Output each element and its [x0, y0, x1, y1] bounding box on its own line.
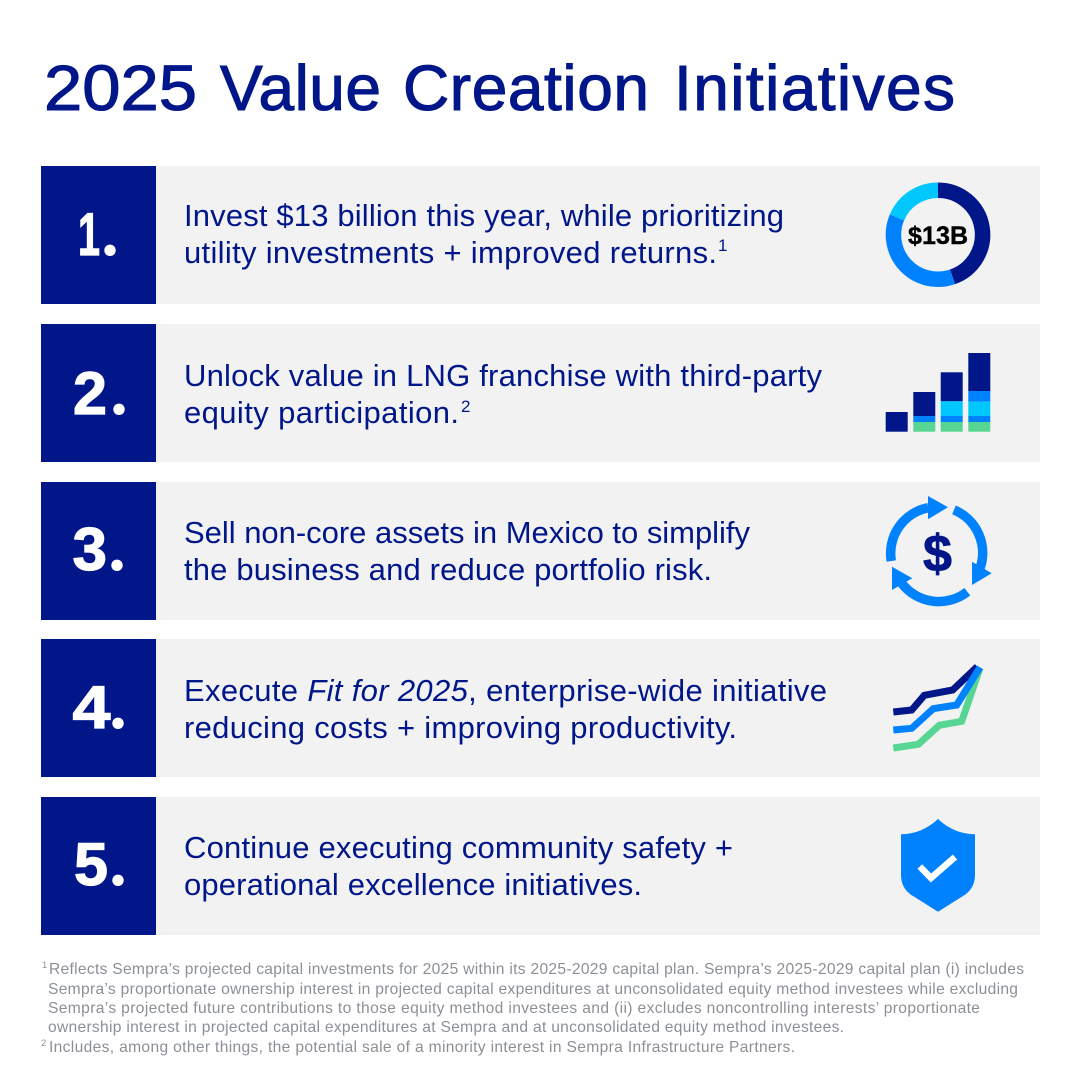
number badge 4: 4 — [72, 674, 111, 741]
footnotes: Sempra’s proportionate ownership interest in projected capital expenditures at unconsolidated equity method investees while excluding — [48, 981, 1018, 998]
number badge 5: . — [109, 824, 127, 901]
icon: rising line chart — [893, 667, 980, 748]
title — [44, 52, 955, 124]
title: Creation — [403, 52, 649, 124]
text: initiative 3: the business and reduce portfolio risk. — [184, 552, 712, 587]
text: initiative 4: reducing costs + improving productivity. — [184, 710, 737, 745]
icon: dollar with circular arrows: $ — [923, 525, 952, 583]
icon: shield with check mark — [901, 819, 975, 912]
footnotes: Reflects Sempra’s projected capital investments for 2025 within its 2025-2029 capital plan. Sempra’s 2025-2029 capital plan (i) includes — [49, 961, 1024, 978]
number badge 1: 1 — [78, 201, 100, 268]
number badge 5: 5 — [74, 831, 108, 898]
icon: stacked bar chart — [886, 353, 990, 432]
panel: initiative 5 — [41, 797, 1040, 935]
number badge 1 — [41, 166, 156, 304]
footnotes: ownership interest in projected capital expenditures at Sempra and at unconsolidated equity method investees. — [48, 1019, 844, 1036]
text: initiative 2: 2 — [461, 397, 470, 416]
text: initiative 5: operational excellence initiatives. — [184, 867, 642, 902]
number badge 3 — [41, 482, 156, 620]
number badge 4: . — [109, 667, 127, 744]
text: initiative 5: Continue executing community safety + — [184, 830, 733, 865]
text: initiative 2: equity participation. — [184, 395, 459, 430]
text: initiative 2: Unlock value in LNG franchise with third-party — [184, 358, 822, 393]
number badge 4 — [41, 639, 156, 777]
title: 2025 — [44, 52, 197, 124]
text: initiative 1: utility investments + improved returns. — [184, 235, 717, 270]
text: initiative 1: Invest $13 billion this year, while prioritizing — [184, 198, 784, 233]
footnotes: 2 — [41, 1038, 46, 1049]
text: initiative 1: 1 — [718, 236, 727, 255]
number badge 5 — [41, 797, 156, 935]
text: initiative 4 — [184, 673, 827, 745]
panel: initiative 1 — [41, 166, 1040, 304]
footnotes: 1 — [42, 960, 47, 971]
number badge 3: . — [108, 509, 126, 586]
panel: initiative 4 — [41, 639, 1040, 777]
text: initiative 5 — [184, 830, 733, 902]
footnotes — [41, 960, 1024, 1056]
panel: initiative 3 — [41, 482, 1040, 620]
title: Initiatives — [674, 52, 955, 124]
panel: initiative 2 — [41, 324, 1040, 462]
text: initiative 2 — [184, 358, 822, 430]
title: Value — [220, 52, 381, 124]
footnotes: Sempra’s projected future contributions to those equity method investees and (ii) excludes noncontrolling interests’ proportionate — [48, 1000, 980, 1017]
icon: dollar with circular arrows — [891, 496, 992, 602]
number badge 2: 2 — [73, 360, 107, 427]
text: initiative 1 — [184, 198, 784, 270]
footnotes: Includes, among other things, the potential sale of a minority interest in Sempra Infrastructure Partners. — [49, 1039, 795, 1056]
icon: donut chart $13B — [893, 190, 983, 279]
text: initiative 4: Execute Fit for 2025, enterprise-wide initiative — [184, 673, 827, 708]
text: initiative 3 — [184, 515, 750, 587]
icon: donut chart $13B: $13B — [908, 222, 968, 250]
number badge 2: . — [110, 353, 128, 430]
number badge 3: 3 — [72, 516, 107, 583]
number badge 1: . — [101, 194, 119, 271]
number badge 2 — [41, 324, 156, 462]
text: initiative 3: Sell non-core assets in Mexico to simplify — [184, 515, 750, 550]
